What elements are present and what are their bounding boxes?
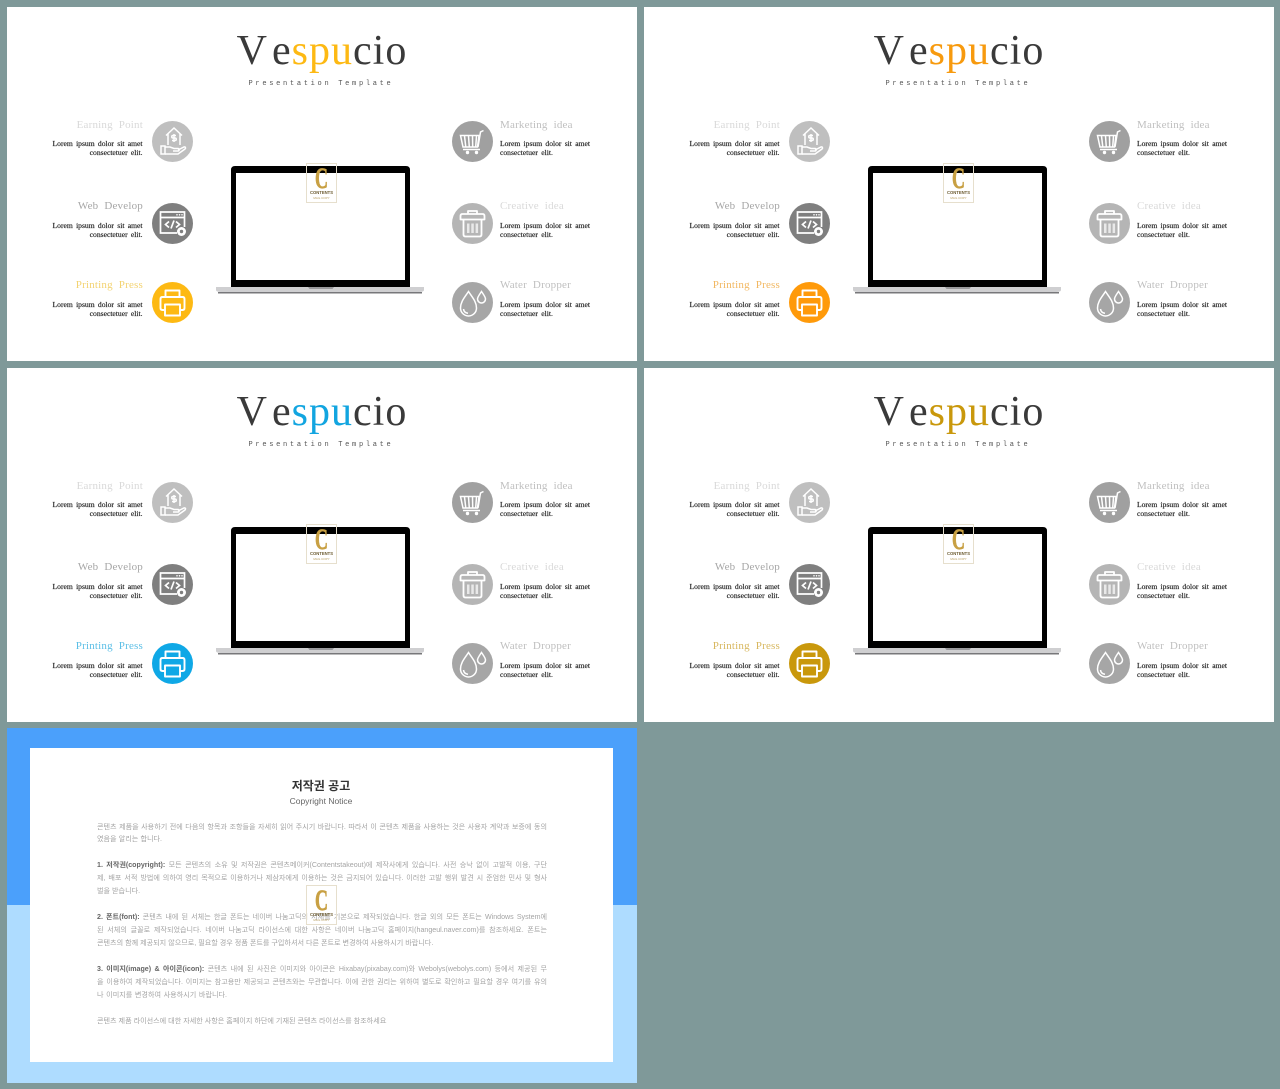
subtitle: Presentation Template: [886, 441, 1030, 449]
notice heading: 저작권 공고: [292, 779, 350, 793]
item: Web Develop: [52, 561, 193, 605]
item: Creative idea: consectetuer elit.: [500, 590, 553, 600]
watermark logo: [306, 524, 337, 564]
section 3: image and icon: [97, 965, 547, 999]
item: Creative idea: [1089, 200, 1227, 244]
panel: yellow variant: [7, 7, 637, 361]
panel: gold variant: [644, 368, 1274, 722]
item: Printing Press: Printing Press: [713, 640, 780, 652]
title: Vespucio: [237, 28, 407, 74]
laptop: [216, 166, 424, 294]
item: Earning Point: Earning Point: [714, 480, 780, 492]
panel: copyright notice: 된 서체의 글꼴로 제작되었습니다. 네이버 나눔고딕 라이선스에 대한 사항은 네이버 나눔고딕 홈페이지(hangeul.naver.com)를 참조하세요. 폰트는: [97, 926, 547, 934]
item: Water Dropper: [452, 279, 590, 323]
watermark logo: MAIL COPY: [950, 196, 967, 200]
item: Printing Press: Printing Press: [76, 640, 143, 652]
item: Water Dropper: Lorem ipsum dolor sit amet: [500, 300, 590, 309]
item: Printing Press: Printing Press: [713, 279, 780, 291]
item: Earning Point: Lorem ipsum dolor sit amet: [690, 139, 780, 148]
item: Printing Press: [690, 279, 830, 323]
item: Printing Press: Lorem ipsum dolor sit amet: [690, 661, 780, 670]
watermark logo: MAIL COPY: [950, 557, 967, 561]
item: Web Develop: [690, 200, 830, 244]
item: Printing Press: consectetuer elit.: [727, 308, 780, 318]
panel: copyright notice: 벌을 받습니다.: [97, 887, 140, 895]
item: Water Dropper: [452, 640, 590, 684]
item: Creative idea: Creative idea: [1137, 561, 1201, 573]
panel: copyright notice: 3. 이미지(image) & 아이콘(icon): 콘텐츠 내에 된 사진은 이미지와 아이콘은 Hixabay(pixabay.com)와 Webolys(webolys.com) 등에서 제공된 무: [97, 965, 547, 973]
item: Web Develop: [690, 561, 830, 605]
panel: copyright notice: 였음을 알리는 합니다.: [97, 835, 162, 843]
item: Water Dropper: consectetuer elit.: [1137, 670, 1190, 678]
item: Web Develop: consectetuer elit.: [90, 230, 142, 238]
item: Earning Point: Earning Point: [714, 119, 780, 131]
subtitle: Presentation Template: [886, 80, 1030, 88]
panel: copyright notice: 1. 저작권(copyright): 모든 콘텐츠의 소유 및 저작권은 콘텐츠메이커(Contentstakeout)에 제작사에게 있습니다. 사전 승낙 없이 고발적 이용, 구단: [97, 861, 547, 869]
panel: copyright notice: 을 이용하여 제작되었습니다. 이미지는 참고용만 제공되고 콘텐츠와는 무관합니다. 이에 관한 권리는 위하여 별도로 확인하고 필요할 경우 여기를 유의: [97, 978, 547, 986]
item: Web Develop: Web Develop: [78, 561, 143, 573]
panel: copyright notice: [7, 728, 637, 1083]
item: Creative idea: consectetuer elit.: [500, 230, 553, 238]
item: Water Dropper: consectetuer elit.: [500, 308, 553, 318]
title: Vespucio: [874, 389, 1044, 435]
section 1: copyright: [97, 861, 547, 895]
intro paragraph: [97, 823, 547, 843]
item: Marketing idea: Lorem ipsum dolor sit amet: [1137, 139, 1227, 148]
item: Creative idea: [1089, 561, 1227, 605]
item: Web Develop: consectetuer elit.: [727, 230, 780, 238]
item: Water Dropper: Lorem ipsum dolor sit amet: [1137, 661, 1227, 670]
title: Vespucio: [237, 389, 407, 435]
item: Marketing idea: Marketing idea: [1137, 119, 1210, 131]
item: Marketing idea: [452, 119, 590, 162]
item: Water Dropper: Water Dropper: [1137, 640, 1208, 652]
laptop: [853, 166, 1061, 294]
item: Creative idea: consectetuer elit.: [1137, 230, 1190, 238]
item: Creative idea: Lorem ipsum dolor sit amet: [1137, 582, 1227, 591]
panel: copyright notice: 콘텐츠의 함께 제공되지 않으므로, 필요할 경우 정품 폰트를 구입하셔서 다른 폰트로 변경하여 사용하시기 바랍니다.: [97, 939, 433, 947]
watermark logo: MAIL COPY: [313, 918, 330, 922]
watermark logo: MAIL COPY: [313, 557, 330, 561]
watermark logo: CONTENTS: [310, 551, 333, 556]
item: Marketing idea: [452, 480, 590, 523]
white notice card: [30, 748, 613, 1062]
item: Marketing idea: Marketing idea: [500, 480, 573, 492]
item: Marketing idea: Marketing idea: [1137, 480, 1210, 492]
licence note: 콘텐츠 제품 라이선스에 대한 자세한 사항은 홈페이지 하단에 기재된 콘텐츠 라이선스를 참조하세요.: [97, 1017, 387, 1025]
item: Marketing idea: Lorem ipsum dolor sit amet: [500, 139, 590, 148]
panel: orange variant: [644, 7, 1274, 361]
item: Marketing idea: [1089, 480, 1227, 523]
item: Creative idea: Creative idea: [500, 561, 564, 573]
item: Printing Press: consectetuer elit.: [90, 308, 142, 318]
item: Earning Point: Lorem ipsum dolor sit amet: [53, 500, 142, 509]
item: Water Dropper: [1089, 640, 1227, 684]
item: Printing Press: [52, 640, 193, 684]
item: Earning Point: Lorem ipsum dolor sit amet: [53, 139, 142, 148]
watermark logo: MAIL COPY: [313, 196, 330, 200]
item: Creative idea: Lorem ipsum dolor sit amet: [1137, 221, 1227, 230]
item: Earning Point: consectetuer elit.: [727, 508, 780, 518]
item: Web Develop: Web Develop: [78, 200, 143, 212]
panel: blue variant: [7, 368, 637, 722]
item: Web Develop: Web Develop: [715, 200, 780, 212]
watermark logo: CONTENTS: [947, 190, 970, 195]
item: Earning Point: consectetuer elit.: [90, 508, 142, 518]
item: Printing Press: Lorem ipsum dolor sit amet: [53, 661, 142, 670]
item: Web Develop: [52, 200, 193, 244]
item: Marketing idea: Lorem ipsum dolor sit amet: [1137, 500, 1227, 509]
watermark logo: [306, 163, 337, 203]
watermark logo: CONTENTS: [947, 551, 970, 556]
item: Web Develop: Lorem ipsum dolor sit amet: [53, 582, 142, 591]
subtitle: Presentation Template: [249, 80, 393, 88]
item: Printing Press: consectetuer elit.: [727, 670, 780, 678]
item: Web Develop: Lorem ipsum dolor sit amet: [690, 582, 780, 591]
item: Creative idea: [452, 200, 590, 244]
notice subheading: Copyright Notice: [290, 796, 352, 806]
watermark logo: CONTENTS: [310, 912, 333, 917]
item: Printing Press: [52, 279, 193, 323]
item: Web Develop: Lorem ipsum dolor sit amet: [53, 221, 142, 230]
panel: copyright notice: 콘텐츠 제품을 사용하기 전에 다음의 항목과 조항들을 자세히 읽어 주시기 바랍니다. 따라서 이 콘텐츠 제품을 사용하는 것은 사용자 계약과 보증에 동의: [97, 823, 547, 831]
panel: copyright notice: 제, 배포 서적 방법에 의하여 영리 목적으로 이용하거나 제삼자에게 이용하는 것은 금지되어 있습니다. 이러한 고발 행위 발견 시 준엄한 민사 및 형사: [97, 874, 547, 882]
item: Creative idea: Creative idea: [1137, 200, 1201, 212]
item: Water Dropper: consectetuer elit.: [1137, 308, 1190, 318]
item: Marketing idea: consectetuer elit.: [500, 508, 553, 518]
item: Creative idea: consectetuer elit.: [1137, 590, 1190, 600]
item: Water Dropper: Water Dropper: [500, 640, 571, 652]
watermark logo: CONTENTS: [310, 190, 333, 195]
laptop: [853, 527, 1061, 654]
item: Web Develop: Web Develop: [715, 561, 780, 573]
item: Earning Point: Earning Point: [77, 480, 143, 492]
item: Printing Press: Lorem ipsum dolor sit amet: [53, 300, 142, 309]
item: Water Dropper: Lorem ipsum dolor sit amet: [500, 661, 590, 670]
item: Earning Point: [690, 480, 830, 523]
item: Marketing idea: consectetuer elit.: [500, 148, 553, 156]
item: Creative idea: [452, 561, 590, 605]
item: Earning Point: Earning Point: [77, 119, 143, 131]
section 2: font: [97, 913, 547, 947]
title: Vespucio: [874, 28, 1044, 74]
item: Marketing idea: Lorem ipsum dolor sit amet: [500, 500, 590, 509]
item: Earning Point: [52, 480, 193, 523]
panel: copyright notice: 나 이미지를 변경하여 사용하시기 바랍니다.: [97, 991, 227, 999]
item: Printing Press: [690, 640, 830, 684]
item: Water Dropper: Water Dropper: [500, 279, 571, 291]
item: Marketing idea: consectetuer elit.: [1137, 508, 1190, 518]
item: Creative idea: Lorem ipsum dolor sit amet: [500, 582, 590, 591]
item: Water Dropper: Water Dropper: [1137, 279, 1208, 291]
item: Printing Press: consectetuer elit.: [90, 670, 142, 678]
laptop: [216, 527, 424, 654]
item: Web Develop: Lorem ipsum dolor sit amet: [690, 221, 780, 230]
subtitle: Presentation Template: [249, 441, 393, 449]
item: Earning Point: [52, 119, 193, 162]
watermark logo: [306, 885, 337, 925]
item: Water Dropper: consectetuer elit.: [500, 670, 553, 678]
item: Earning Point: Lorem ipsum dolor sit amet: [690, 500, 780, 509]
item: Creative idea: Creative idea: [500, 200, 564, 212]
item: Marketing idea: Marketing idea: [500, 119, 573, 131]
watermark logo: [943, 524, 974, 564]
item: Marketing idea: [1089, 119, 1227, 162]
item: Web Develop: consectetuer elit.: [90, 590, 142, 600]
panel: copyright notice: 2. 폰트(font): 콘텐츠 내에 된 서체는 한글 폰트는 네이버 나눔고딕의 서체를 기본으로 제작되었습니다. 한글 외의 모든 폰트는 Windows System에: [97, 913, 547, 921]
item: Earning Point: [690, 119, 830, 162]
item: Earning Point: consectetuer elit.: [90, 148, 142, 156]
item: Marketing idea: consectetuer elit.: [1137, 148, 1190, 156]
watermark logo: [943, 163, 974, 203]
item: Water Dropper: [1089, 279, 1227, 323]
item: Printing Press: Printing Press: [76, 279, 143, 291]
item: Web Develop: consectetuer elit.: [727, 590, 780, 600]
item: Water Dropper: Lorem ipsum dolor sit amet: [1137, 300, 1227, 309]
item: Creative idea: Lorem ipsum dolor sit amet: [500, 221, 590, 230]
item: Earning Point: consectetuer elit.: [727, 148, 780, 156]
item: Printing Press: Lorem ipsum dolor sit amet: [690, 300, 780, 309]
